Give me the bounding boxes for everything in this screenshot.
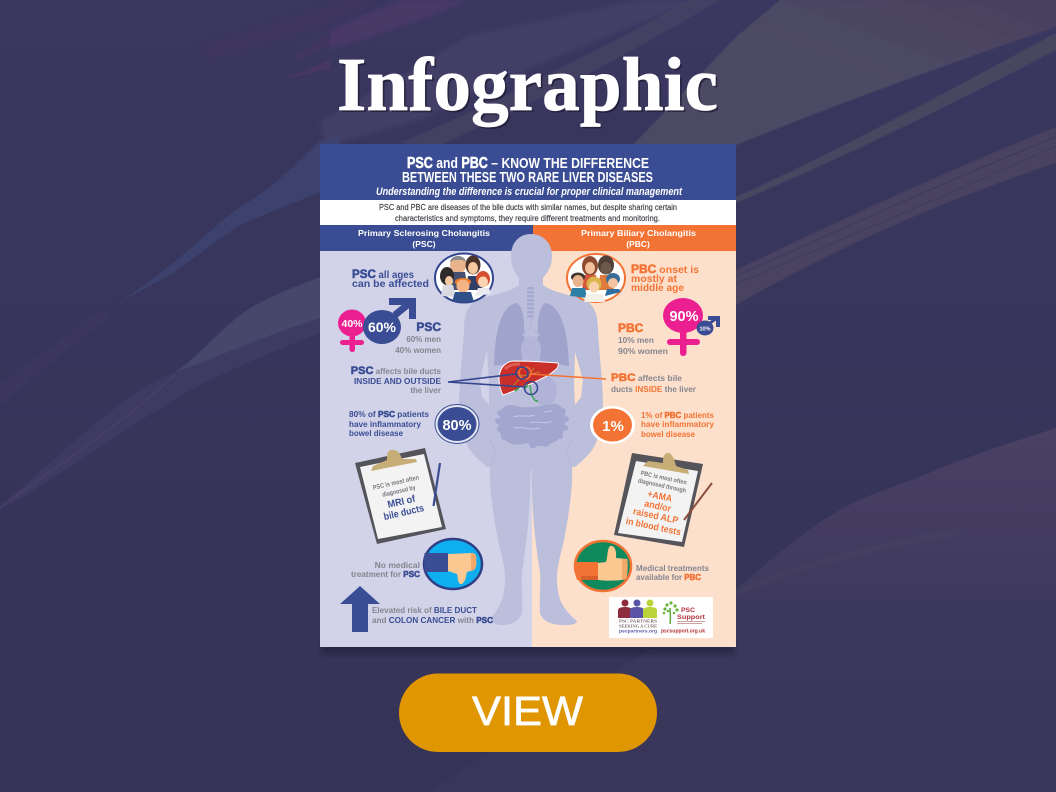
- column header: PBC: Primary Biliary Cholangitis: [581, 228, 696, 238]
- icon: thumbs up: [575, 541, 631, 591]
- PSC bile duct text: INSIDE AND OUTSIDE: [354, 377, 442, 386]
- PBC bile duct text: [611, 373, 696, 392]
- connector line PBC: [519, 367, 606, 379]
- column header: PSC: Primary Sclerosing Cholangitis: [358, 228, 490, 238]
- PBC 1% badge: [590, 406, 635, 444]
- subheading: Understanding the difference is crucial for proper clinical management: [376, 186, 683, 198]
- PSC 80% badge: [435, 404, 479, 444]
- logo: PSC Support: [661, 601, 706, 634]
- clipboard: PSC MRI diagnosis: [355, 448, 446, 544]
- connector lines PSC: [448, 367, 538, 394]
- logo: PSC Partners: [618, 600, 658, 634]
- intro text band: characteristics and symptoms, they require different treatments and monitoring.: [395, 214, 660, 223]
- liver with bile ducts: [499, 361, 558, 401]
- icon: group of people, middle age: [567, 254, 625, 302]
- PSC gender text: 40% women: [395, 346, 441, 355]
- VIEW button: VIEW: [472, 688, 583, 734]
- PBC gender text: 90% women: [618, 347, 668, 356]
- clipboard: PBC blood tests diagnosis: and/or: [643, 498, 672, 515]
- logo: PSC Support: Support: [677, 614, 706, 621]
- PBC bile duct text: PBC affects bile: [611, 372, 683, 384]
- poster body backgrounds: [320, 251, 736, 647]
- PBC gender icons: [663, 298, 720, 356]
- clipboard: PBC blood tests diagnosis: PBC is most often: [640, 470, 687, 487]
- PSC IBD text: 80% of PSC patients: [349, 410, 430, 419]
- clipboard: PSC MRI diagnosis: PSC is most often: [372, 474, 420, 492]
- PBC 1% badge: 1%: [602, 418, 624, 435]
- clipboard: PSC MRI diagnosis: MRI of: [387, 494, 417, 511]
- PBC IBD text: 1% of PBC patients: [641, 411, 715, 420]
- PBC gender text: 10% men: [618, 336, 654, 345]
- icon: up arrow, elevated risk: [340, 586, 380, 632]
- PSC bile duct text: PSC affects bile ducts: [351, 365, 442, 377]
- elevated risk text: [372, 605, 493, 625]
- lungs: [494, 303, 525, 366]
- PBC onset text: [632, 264, 698, 293]
- poster header banner: [320, 144, 736, 200]
- PBC bile duct text: ducts INSIDE the liver: [611, 385, 696, 394]
- PSC gender text: [395, 322, 441, 353]
- PSC gender text: PSC: [416, 320, 441, 334]
- medical treatments text: available for PBC: [636, 572, 701, 582]
- logo: PSC Support: PSC: [681, 607, 695, 614]
- title: Infographic: [339, 45, 720, 129]
- clipboard: PBC blood tests diagnosis: +AMA: [646, 489, 673, 505]
- PSC all ages text: can be affected: [352, 279, 429, 290]
- clipboard: PSC MRI diagnosis: diagnosed by: [382, 484, 417, 499]
- PBC IBD text: [642, 412, 714, 437]
- clipboard: PBC blood tests diagnosis: diagnosed through: [637, 478, 687, 495]
- medical treatments text: Medical treatments: [636, 563, 709, 573]
- PBC onset text: PBC onset is: [631, 262, 699, 276]
- logo: PSC Partners: SEEKING A CURE: [619, 624, 657, 628]
- no treatment text: [351, 562, 420, 578]
- PSC all ages text: PSC all ages: [352, 267, 414, 281]
- arm gaps: [480, 350, 489, 405]
- PSC all ages text: [352, 269, 428, 287]
- PBC gender text: PBC: [618, 321, 644, 335]
- intro text band: PSC and PBC are diseases of the bile ducts with similar names, but despite sharing certain: [379, 203, 677, 212]
- PBC onset text: middle age: [631, 282, 684, 294]
- PSC gender icons: [338, 298, 416, 352]
- PSC IBD text: [349, 410, 430, 438]
- PBC gender text: [618, 323, 668, 354]
- logo: PSC Partners: PSC PARTNERS: [619, 618, 658, 624]
- icon: blue pen: [434, 463, 440, 506]
- clipboard: PBC blood tests diagnosis: in blood tests: [625, 516, 682, 538]
- intro text band: [320, 200, 736, 225]
- icon: group of people, all ages: [435, 254, 493, 302]
- PBC onset text: mostly at: [631, 273, 677, 285]
- icon: female symbol 90%: 90%: [669, 309, 699, 325]
- logos box: [609, 597, 713, 638]
- logo: PSC Partners: pscpartners.org: [619, 628, 657, 634]
- PBC IBD text: have inflammatory: [641, 420, 715, 429]
- medical treatments text: [636, 563, 709, 582]
- infographic poster: [320, 144, 736, 647]
- clipboard: PBC blood tests diagnosis: raised ALP: [632, 506, 680, 527]
- heading line one: PSC and PBC – KNOW THE DIFFERENCE: [407, 155, 649, 172]
- PSC IBD text: have inflammatory: [349, 420, 422, 429]
- clipboard: PBC blood tests diagnosis: [614, 453, 712, 547]
- column header: PBC: [533, 225, 736, 251]
- human body silhouette with organs: [459, 234, 603, 625]
- heading line two: BETWEEN THESE TWO RARE LIVER DISEASES: [402, 169, 653, 186]
- column header: PSC: (PSC): [412, 239, 436, 249]
- icon: female symbol 40%: 40%: [341, 318, 363, 330]
- logo: PSC Support: pscsupport.org.uk: [661, 628, 705, 634]
- title: Infographic: [337, 43, 718, 127]
- icon: male symbol 60%: 60%: [368, 319, 397, 335]
- PSC IBD text: bowel disease: [349, 429, 404, 438]
- column header: PSC: [320, 225, 533, 251]
- PBC IBD text: bowel disease: [641, 430, 696, 439]
- no treatment text: treatment for PSC: [351, 569, 420, 579]
- elevated risk text: Elevated risk of BILE DUCT: [372, 605, 478, 615]
- icon: red pen: [684, 483, 712, 520]
- icon: male symbol 10%: 10%: [699, 326, 711, 332]
- VIEW button: [399, 674, 657, 752]
- PSC gender text: 60% men: [406, 335, 441, 344]
- PSC 80% badge: 80%: [442, 418, 472, 434]
- stomach and intestine: [533, 376, 557, 406]
- spine: [527, 287, 534, 318]
- PSC bile duct text: the liver: [410, 386, 441, 395]
- no treatment text: No medical: [375, 560, 420, 570]
- panel shadow: [322, 640, 734, 654]
- icon: thumbs down: [424, 539, 482, 589]
- PSC bile duct text: [351, 366, 441, 393]
- clipboard: PSC MRI diagnosis: bile ducts: [383, 503, 426, 523]
- elevated risk text: and COLON CANCER with PSC: [372, 615, 493, 625]
- column header: PBC: (PBC): [626, 239, 650, 249]
